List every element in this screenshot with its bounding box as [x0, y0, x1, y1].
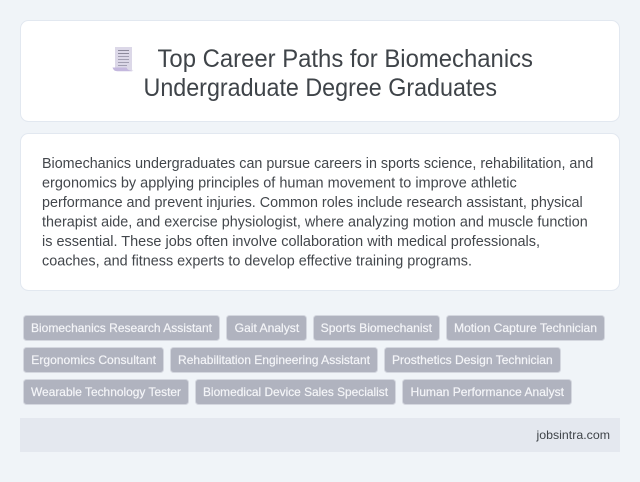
tag: Prosthetics Design Technician	[384, 348, 560, 372]
title	[144, 45, 533, 102]
tag: Sports Biomechanist: Sports Biomechanist	[321, 321, 433, 335]
description text: coaches, and fitness experts to develop effective training programs.	[42, 253, 472, 269]
tag: Human Performance Analyst: Human Performance Analyst	[410, 385, 565, 399]
tag: Motion Capture Technician: Motion Capture Technician	[454, 321, 597, 335]
tag: Biomechanics Research Assistant: Biomechanics Research Assistant	[31, 321, 213, 335]
tag: Wearable Technology Tester	[24, 380, 188, 404]
tag: Prosthetics Design Technician: Prosthetics Design Technician	[392, 353, 553, 367]
tag: Sports Biomechanist	[314, 316, 440, 340]
tag: Biomedical Device Sales Specialist: Biomedical Device Sales Specialist	[203, 385, 389, 399]
footer source text: jobsintra.com	[535, 428, 610, 442]
description text: performance and prevent injuries. Common roles include research assistant, physical	[42, 195, 583, 211]
title: Top Career Paths for Biomechanics	[158, 45, 533, 73]
tag: Rehabilitation Engineering Assistant: Rehabilitation Engineering Assistant	[178, 353, 371, 367]
tag: Ergonomics Consultant: Ergonomics Consultant	[31, 353, 157, 367]
tag: Wearable Technology Tester: Wearable Technology Tester	[31, 385, 181, 399]
tag: Rehabilitation Engineering Assistant	[170, 348, 378, 372]
panel: career tags	[24, 316, 604, 404]
description text: ergonomics by applying principles of human movement to improve athletic	[42, 176, 517, 192]
description text: therapist aide, and exercise physiologist, where analyzing motion and muscle function	[42, 214, 588, 230]
icon: paper scroll	[112, 47, 134, 71]
footer bar	[20, 418, 620, 452]
tag: Gait Analyst	[226, 316, 306, 340]
tag: Human Performance Analyst	[402, 380, 572, 404]
description text: Biomechanics undergraduates can pursue careers in sports science, rehabilitation, and	[42, 156, 593, 172]
tag: Biomechanics Research Assistant	[24, 316, 220, 340]
description text: is essential. These jobs often involve collaboration with medical professionals,	[42, 234, 540, 250]
tag: Motion Capture Technician	[446, 316, 604, 340]
panel: description card	[20, 134, 620, 290]
tag: Ergonomics Consultant	[24, 348, 164, 372]
tag: Biomedical Device Sales Specialist	[196, 380, 396, 404]
tag: Gait Analyst: Gait Analyst	[235, 321, 300, 335]
panel: title card	[20, 20, 620, 122]
description text	[42, 156, 593, 269]
title: Undergraduate Degree Graduates	[144, 74, 497, 102]
